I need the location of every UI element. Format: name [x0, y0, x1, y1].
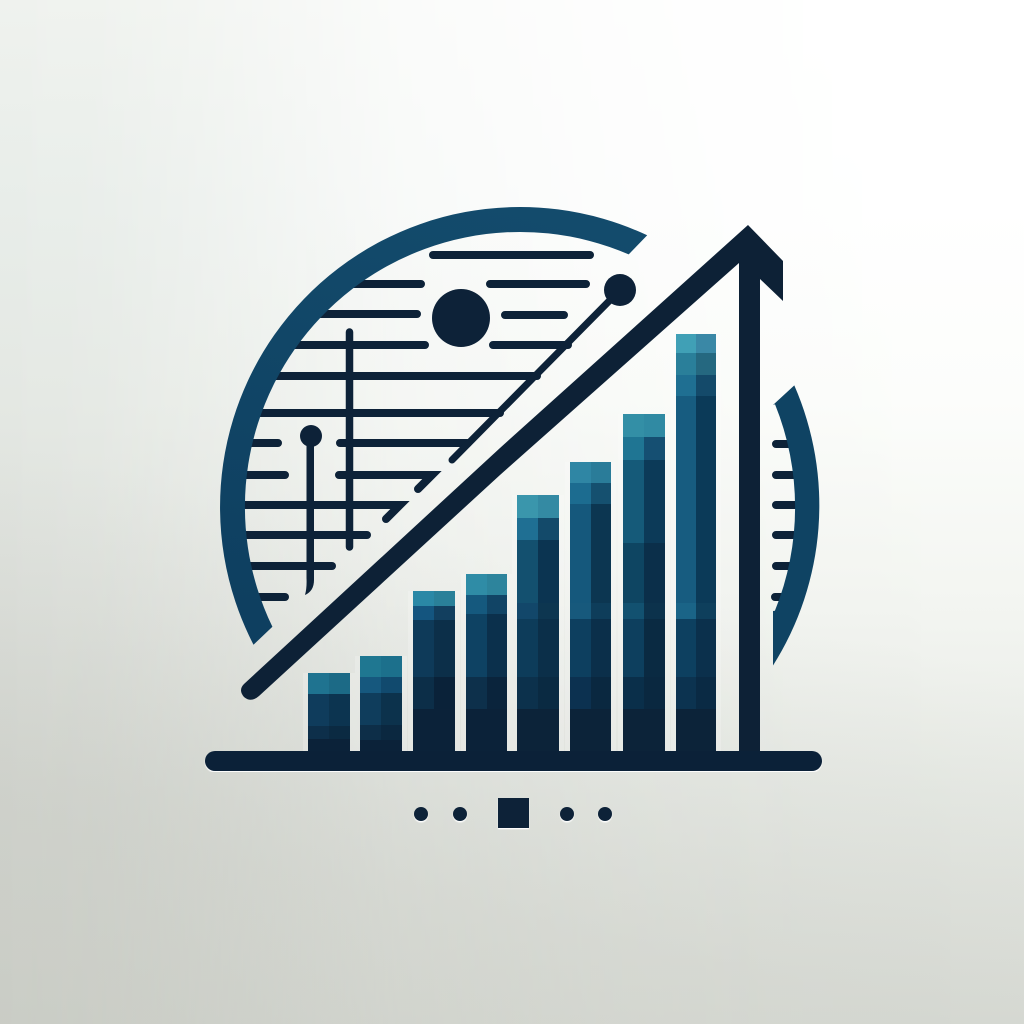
bar chart [308, 334, 716, 753]
thin diagonal with round node [452, 274, 636, 460]
bar 3 [413, 591, 455, 753]
panel: circular emblem with ruled lines [220, 207, 647, 645]
pin marker on left [300, 425, 322, 595]
panel: right ring fragment with ticks [773, 385, 819, 666]
bar 5 [517, 495, 559, 753]
bar 2 [360, 656, 402, 753]
bar 4 [466, 574, 507, 753]
ring arc: right [773, 385, 819, 666]
bar 1 [308, 673, 350, 753]
arrow: rising trend line with arrowhead [241, 225, 783, 755]
bar 7 [623, 414, 665, 753]
pagination markers [414, 798, 612, 828]
bar 8 [676, 334, 716, 753]
right dots [560, 807, 612, 821]
ruled horizontal lines [244, 255, 590, 597]
ring arc: upper left [220, 207, 647, 645]
bar 6 [570, 462, 611, 753]
center square [498, 798, 529, 828]
chart baseline [205, 751, 822, 771]
vertical connector line [346, 332, 353, 547]
large central dot [432, 289, 490, 347]
tick marks [775, 444, 797, 597]
left dots [414, 807, 467, 821]
